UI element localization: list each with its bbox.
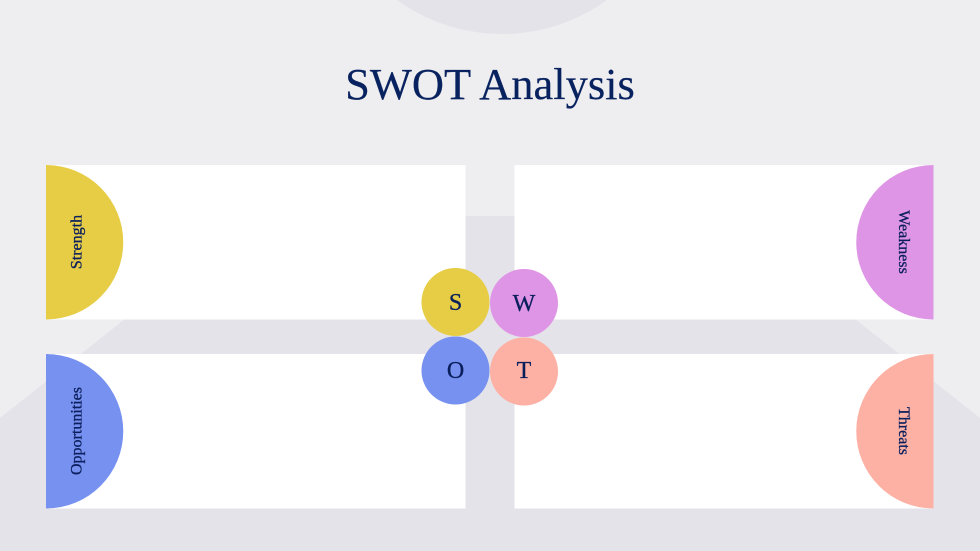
icon: threats half circle <box>856 354 934 508</box>
label: opportunities: Opportunities <box>68 387 86 475</box>
circle: T <box>490 338 558 406</box>
icon: weakness half circle <box>856 165 934 320</box>
icon: opportunities half circle <box>46 354 123 508</box>
circle: W <box>490 269 558 337</box>
icon: strength half circle <box>46 165 123 320</box>
circle: S <box>422 268 490 336</box>
circle: W: W <box>513 291 536 317</box>
panel: opportunities <box>46 354 466 508</box>
label: strength: Strength <box>68 215 86 269</box>
circle: O: O <box>447 358 464 384</box>
circle: T: T <box>517 358 532 384</box>
label: threats: Threats <box>895 407 912 455</box>
title: SWOT Analysis <box>345 59 635 109</box>
circle: O <box>422 336 490 404</box>
panel: strength <box>46 165 466 320</box>
panel: weakness <box>514 165 934 320</box>
circle: S: S <box>449 290 462 316</box>
label: weakness: Weakness <box>895 210 912 274</box>
panel: threats <box>514 354 934 508</box>
